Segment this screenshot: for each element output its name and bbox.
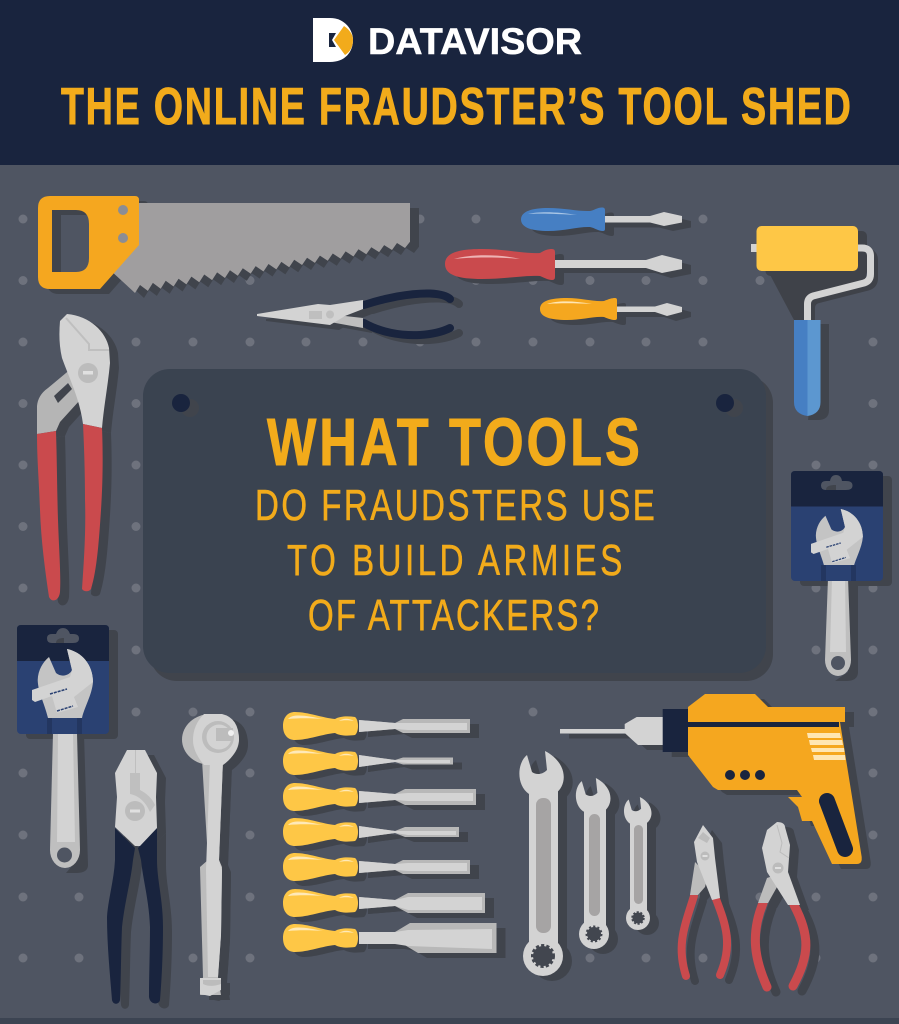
icon: carded wrench, left <box>17 625 109 873</box>
icon: chisel 3 <box>283 783 476 811</box>
icon: chisel 5 <box>283 853 470 881</box>
icon: left sign screw <box>172 394 190 412</box>
title: THE ONLINE FRAUDSTER’S TOOL SHED <box>61 77 851 135</box>
text: do fraudsters use: DO FRAUDSTERS USE <box>255 482 655 530</box>
icon: chisel 6 <box>283 889 485 917</box>
icon: water pump pliers <box>37 314 110 600</box>
text: to build armies: TO BUILD ARMIES <box>287 537 622 585</box>
chisels set <box>283 712 496 953</box>
icon: lineman pliers <box>107 750 163 1004</box>
icon: Datavisor logo mark <box>313 18 353 62</box>
icon: medium combination wrench <box>576 778 610 949</box>
icon: long-nose pliers <box>257 293 450 335</box>
icon: hand saw <box>38 196 410 293</box>
icon: chisel 1 <box>283 712 470 740</box>
icon: large red-handled pliers <box>755 822 806 987</box>
icon: chisel 2 <box>283 747 453 775</box>
icon: small red-handled pliers <box>682 825 727 976</box>
heading: what tools: WHAT TOOLS <box>267 405 640 479</box>
panel: central sign <box>143 369 773 681</box>
icon: socket ratchet <box>182 714 239 996</box>
icon: red screwdriver <box>445 249 682 280</box>
icon: chisel 7 <box>283 923 496 953</box>
icon: blue screwdriver <box>521 207 682 231</box>
logo wordmark: DATAVISOR <box>368 21 582 62</box>
icon: power drill <box>560 694 862 864</box>
icon: paint roller <box>751 226 874 420</box>
icon: chisel 4 <box>283 818 459 846</box>
icon: carded wrench, right <box>791 471 883 681</box>
icon: orange screwdriver <box>540 298 682 320</box>
icon: large combination wrench <box>519 751 564 976</box>
icon: small combination wrench <box>624 797 651 930</box>
text: of attackers: OF ATTACKERS? <box>308 592 599 640</box>
panel: header band <box>0 0 899 165</box>
icon: right sign screw <box>716 394 734 412</box>
